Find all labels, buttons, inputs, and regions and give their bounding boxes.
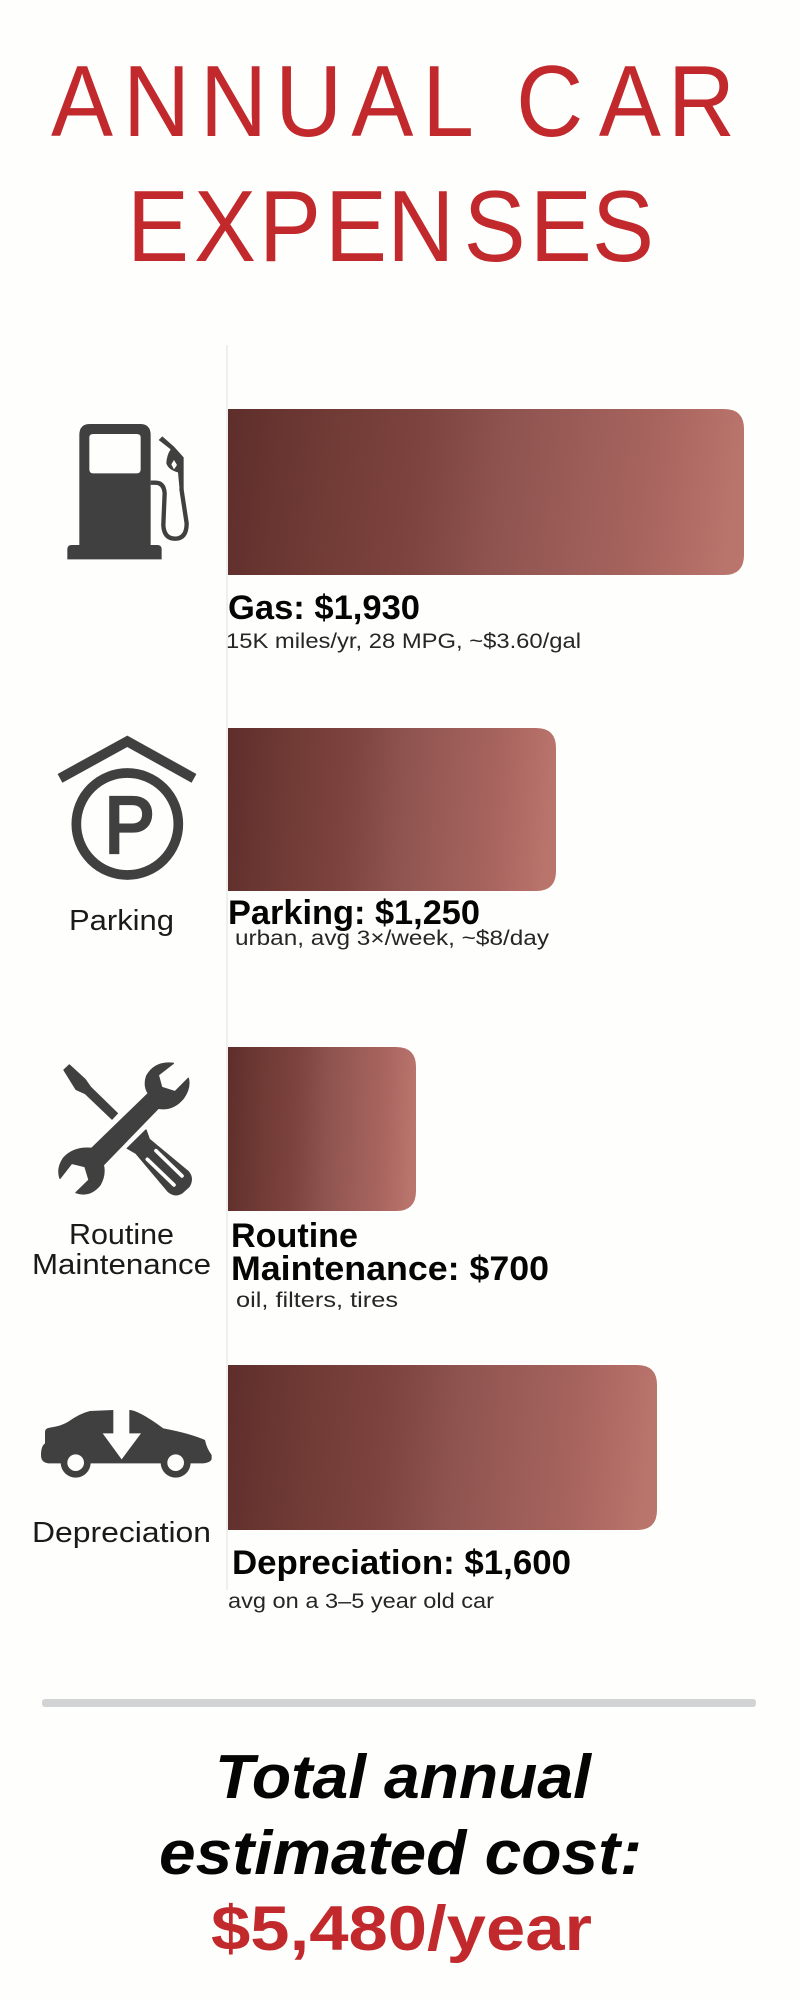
bar: gas [228, 409, 744, 575]
maintenance value label: Maintenance: $700 [231, 1250, 549, 1288]
parking details: urban, avg 3×/week, ~$8/day [235, 927, 550, 950]
icon: car with down arrow [41, 1410, 212, 1478]
maintenance value label: Routine [231, 1217, 358, 1255]
parking category label: Parking [69, 905, 174, 937]
maintenance category label: Maintenance [32, 1249, 211, 1281]
divider [42, 1699, 756, 1707]
total summary: $5,480/year [211, 1894, 592, 1964]
parking value label: Parking: $1,250 [228, 894, 480, 932]
title [51, 44, 735, 283]
maintenance value label [231, 1217, 549, 1288]
maintenance details: oil, filters, tires [236, 1289, 398, 1312]
title: ANNUAL CAR [51, 44, 735, 158]
bar: depreciation [228, 1365, 657, 1530]
depreciation value label: Depreciation: $1,600 [232, 1544, 571, 1582]
depreciation category label: Depreciation [32, 1517, 211, 1549]
icon: parking: P [105, 780, 155, 869]
bar: parking [228, 728, 556, 891]
title: EXPENSES [127, 169, 654, 283]
maintenance category label: Routine [69, 1219, 174, 1251]
gas value label: Gas: $1,930 [228, 589, 420, 627]
total summary [159, 1743, 642, 1964]
maintenance category label [32, 1219, 211, 1281]
total summary: Total annual [215, 1743, 593, 1812]
icon: gas pump [67, 424, 187, 559]
gas details: 15K miles/yr, 28 MPG, ~$3.60/gal [226, 630, 581, 653]
total summary: estimated cost: [159, 1819, 642, 1888]
depreciation details: avg on a 3–5 year old car [228, 1590, 494, 1613]
bar: maintenance [228, 1047, 416, 1211]
icon: parking [60, 741, 194, 875]
icon: wrench and screwdriver [59, 1063, 191, 1195]
